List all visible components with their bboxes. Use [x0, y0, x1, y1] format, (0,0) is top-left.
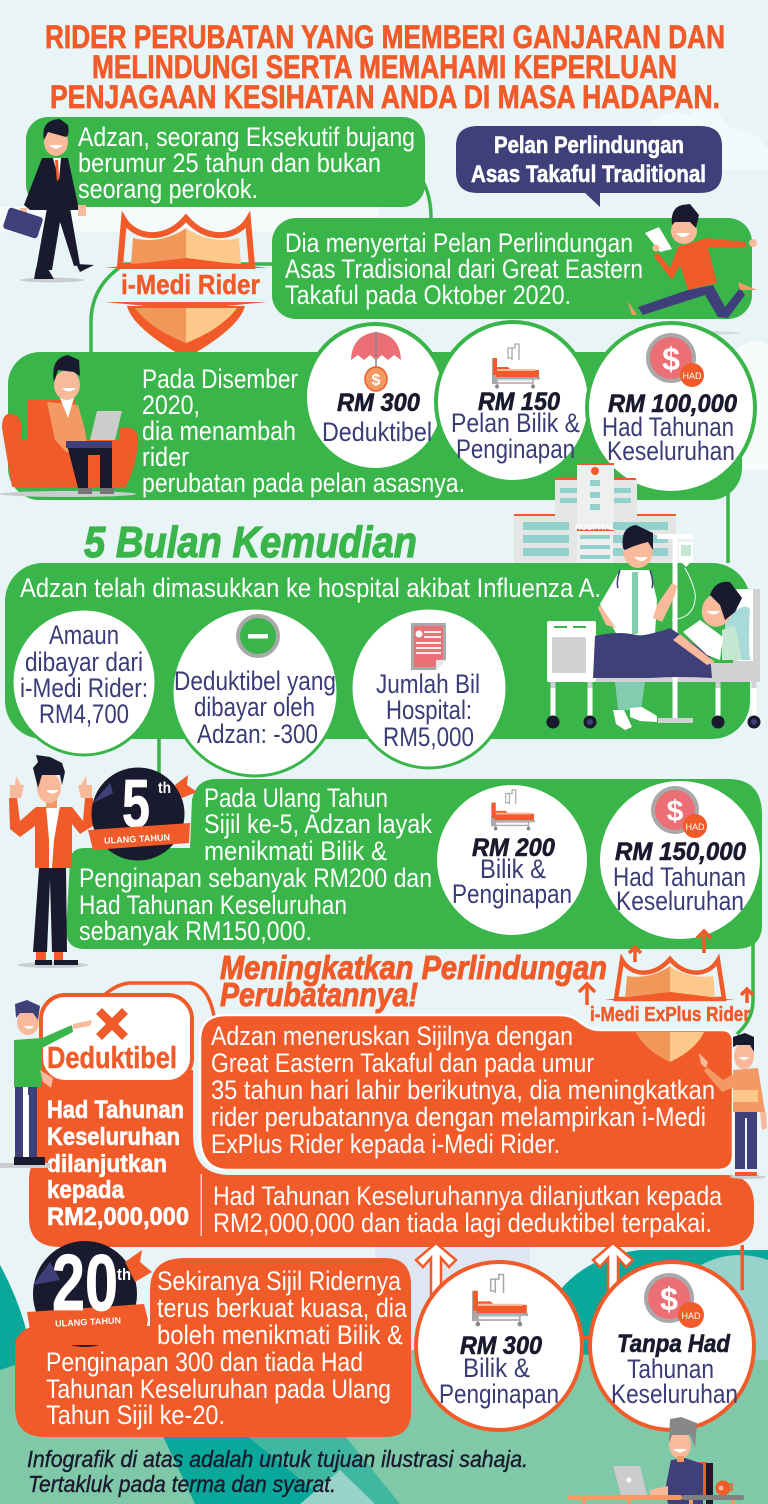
icon: hospital bed — [491, 790, 535, 830]
panel: 5th anniversary: Penginapan sebanyak RM200 dan — [79, 863, 432, 893]
circle: limit RM 150,000: RM 150,000 — [615, 838, 746, 866]
illustration: doctor and patient in bed — [546, 525, 760, 730]
circle: total hospital bill: RM5,000 — [383, 722, 474, 752]
circle: amount paid by rider: Amaun — [49, 620, 119, 650]
icon: dollar limit: HAD — [682, 371, 702, 381]
panel: upgrade story: Great Eastern Takaful dan pada umur — [211, 1048, 594, 1078]
icon: i-Medi ExPlus Rider shield — [590, 959, 750, 1062]
panel: 20th anniversary text: boleh menikmati Bilik & — [157, 1320, 403, 1350]
circle: room and board RM 150: Pelan Bilik & — [451, 408, 580, 438]
panel: 20th anniversary text: Penginapan 300 dan tiada Had — [46, 1347, 363, 1377]
panel: joined basic plan: Dia menyertai Pelan Perlindungan — [285, 228, 633, 258]
box: no deductible: Deduktibel — [47, 1040, 177, 1075]
panel: 5th anniversary — [66, 779, 762, 949]
panel: upgrade story: ExPlus Rider kepada i-Medi Rider. — [211, 1129, 560, 1159]
footer note — [27, 1446, 528, 1497]
circle: amount paid by rider: dibayar dari — [25, 647, 143, 677]
badge: 20th anniversary: 20 — [52, 1238, 118, 1327]
circle: total hospital bill: Jumlah Bil — [376, 669, 480, 699]
panel: joined basic plan: Asas Tradisional dari Great Eastern — [285, 254, 643, 284]
icon: i-Medi Rider shield — [105, 218, 267, 358]
circle: room RM 300: Penginapan — [439, 1379, 559, 1409]
panel: rider added December 2020: 2020, — [142, 390, 200, 420]
icon: dollar limit: HAD — [681, 1311, 701, 1321]
panel: limit raised L shape: RM2,000,000 dan tiada lagi deduktibel terpakai. — [213, 1208, 712, 1238]
footer note: Infografik di atas adalah untuk tujuan ilustrasi sahaja. — [27, 1446, 528, 1472]
circle: amount paid by rider: i-Medi Rider: — [20, 673, 148, 703]
circle: deductible RM 300: Deduktibel — [322, 417, 432, 447]
icon: man on sofa with laptop — [0, 355, 138, 497]
badge: 5th anniversary: ULANG TAHUN — [104, 832, 170, 846]
icon: minus — [236, 614, 280, 658]
panel: limit raised L shape: kepada — [47, 1176, 125, 1204]
panel: intro Adzan: Adzan, seorang Eksekutif bujang — [78, 122, 415, 152]
heading: upgrade protection: Perubatannya! — [220, 976, 418, 1013]
panel: limit raised L shape: Had Tahunan — [47, 1096, 184, 1124]
icon: dollar limit: $ — [662, 341, 680, 377]
circle: room and board RM 150 — [436, 322, 590, 482]
panel: rider added December 2020: rider — [142, 442, 189, 472]
panel: rider added December 2020 — [8, 352, 742, 500]
figure: man thumbs up — [9, 755, 93, 968]
circle: annual limit RM 100,000: Keseluruhan — [607, 436, 735, 466]
panel: joined basic plan: Takaful pada Oktober 2020. — [285, 280, 571, 310]
circle: deductible paid — [172, 608, 338, 776]
panel: 5th anniversary: Pada Ulang Tahun — [204, 783, 388, 813]
circle: room RM 200: RM 200 — [472, 834, 555, 862]
panel: 5th anniversary: Had Tahunan Keseluruhan — [79, 890, 347, 920]
circle: deductible RM 300 — [305, 324, 445, 470]
heading: upgrade protection — [220, 949, 607, 1013]
panel: limit raised L shape — [29, 1070, 754, 1247]
panel: upgrade story — [200, 1015, 733, 1170]
circle: annual limit RM 100,000: RM 100,000 — [608, 390, 737, 418]
badge: 5th anniversary: 5 — [122, 766, 150, 842]
panel: intro Adzan: berumur 25 tahun dan bukan — [78, 148, 381, 178]
icon: i-Medi Rider shield: i-Medi Rider — [121, 269, 260, 300]
arrows: white up arrows — [416, 1243, 633, 1300]
circle: amount paid by rider: RM4,700 — [39, 699, 129, 729]
heading: 5 Bulan Kemudian: 5 Bulan Kemudian — [84, 518, 417, 567]
circle: room RM 200: Bilik & — [480, 854, 546, 884]
panel: 5th anniversary: Sijil ke-5, Adzan layak — [204, 809, 432, 839]
callout: plan label — [456, 126, 722, 207]
panel: upgrade story: rider perubatannya dengan melampirkan i-Medi — [211, 1102, 706, 1132]
panel: rider added December 2020: perubatan pada pelan asasnya. — [142, 468, 465, 498]
panel: limit raised L shape: dilanjutkan — [47, 1150, 167, 1178]
figure: walking man with briefcase — [2, 119, 94, 282]
icon: cross — [96, 1008, 128, 1040]
arrows: upgrade up arrows — [579, 931, 753, 1005]
panel: limit raised L shape: RM2,000,000 — [47, 1203, 189, 1231]
icon: hospital bed — [472, 1274, 528, 1326]
circle: room RM 200: Penginapan — [452, 879, 572, 909]
figure: man pointing at shield — [699, 1033, 767, 1179]
circle: total hospital bill: Hospital: — [386, 695, 472, 725]
panel: limit raised L shape: Keseluruhan — [47, 1123, 180, 1151]
panel: hospitalised: Adzan telah dimasukkan ke hospital akibat Influenza A. — [20, 573, 601, 603]
circle: unlimited annual limit: Tahunan — [627, 1354, 714, 1384]
connector lines green — [91, 180, 753, 1034]
circle: annual limit RM 100,000: Had Tahunan — [602, 412, 734, 442]
icon: umbrella with coin: $ — [372, 372, 381, 389]
icon: dollar limit — [646, 333, 704, 387]
box: no deductible — [41, 995, 192, 1082]
footer note: Tertakluk pada terma dan syarat. — [28, 1471, 336, 1497]
circle: room RM 200 — [437, 785, 587, 935]
panel: 5th anniversary: menikmati Bilik & — [204, 836, 387, 866]
callout: plan label: Asas Takaful Traditional — [471, 161, 706, 188]
panel: intro Adzan: seorang perokok. — [78, 174, 258, 204]
icon: dollar limit: $ — [667, 795, 684, 828]
circle: unlimited annual limit — [590, 1262, 754, 1430]
circle: unlimited annual limit: Tanpa Had — [617, 1330, 731, 1358]
circle: unlimited annual limit: Keseluruhan — [611, 1379, 738, 1409]
orange outline around Deduktibel — [100, 983, 214, 1016]
panel: rider added December 2020: dia menambah — [142, 416, 296, 446]
circle: total hospital bill — [351, 608, 507, 768]
icon: hospital building: HOSPITAL — [575, 523, 615, 532]
circle: limit RM 150,000 — [600, 781, 760, 939]
panel: 20th anniversary text: Tahun Sijil ke-20. — [46, 1400, 225, 1430]
panel: 20th anniversary text — [15, 1258, 411, 1437]
figure: older man at laptop — [568, 1417, 744, 1504]
icon: hospital bed — [492, 344, 540, 388]
panel: 5th anniversary: sebanyak RM150,000. — [79, 916, 312, 946]
panel: hospitalised — [5, 563, 750, 739]
circle: room RM 300: RM 300 — [460, 1332, 542, 1360]
icon: bill document — [411, 623, 446, 670]
panel: rider added December 2020: Pada Disember — [142, 364, 298, 394]
circle: room RM 300 — [416, 1262, 582, 1430]
connector: orange links — [580, 1245, 744, 1340]
heading: upgrade protection: Meningkatkan Perlindungan — [220, 949, 607, 986]
circle: deductible RM 300: RM 300 — [337, 389, 420, 417]
icon: dollar limit — [651, 786, 707, 838]
icon: dollar limit: HAD — [685, 822, 705, 832]
badge: 5th anniversary — [88, 766, 197, 860]
panel: upgrade story: Adzan meneruskan Sijilnya dengan — [211, 1021, 573, 1051]
circle: limit RM 150,000: Keseluruhan — [616, 886, 744, 916]
panel: 20th anniversary text: Tahunan Keseluruhan pada Ulang — [46, 1374, 391, 1404]
badge: 20th anniversary: ULANG TAHUN — [55, 1315, 121, 1329]
panel: joined basic plan — [272, 218, 752, 319]
icon: dollar limit: $ — [660, 1281, 678, 1317]
circle: deductible paid: Adzan: -300 — [197, 719, 318, 749]
title — [45, 19, 725, 115]
icon: hospital building — [514, 463, 676, 575]
panel: 20th anniversary text: terus berkuat kuasa, dia — [157, 1293, 408, 1323]
icon: umbrella with coin — [351, 332, 401, 391]
callout: plan label: Pelan Perlindungan — [494, 132, 684, 159]
circle: annual limit RM 100,000 — [587, 323, 755, 493]
panel: 20th anniversary text: Sekiranya Sijil Ridernya — [157, 1266, 402, 1296]
badge: 20th anniversary — [15, 1238, 152, 1347]
icon: dollar limit — [644, 1273, 704, 1328]
circle: room and board RM 150: RM 150 — [478, 388, 560, 416]
circle: room RM 300: Bilik & — [463, 1353, 530, 1383]
circle: deductible paid: dibayar oleh — [194, 692, 315, 722]
circle: amount paid by rider — [12, 609, 156, 755]
panel: intro Adzan — [26, 117, 425, 207]
figure: man in green pointing — [0, 1000, 92, 1168]
badge: 5th anniversary: th — [158, 780, 171, 797]
circle: room and board RM 150: Penginapan — [456, 434, 575, 464]
circle: deductible paid: Deduktibel yang — [174, 666, 336, 696]
figure: running man with paper — [627, 204, 757, 335]
badge: 20th anniversary: th — [117, 1265, 131, 1284]
